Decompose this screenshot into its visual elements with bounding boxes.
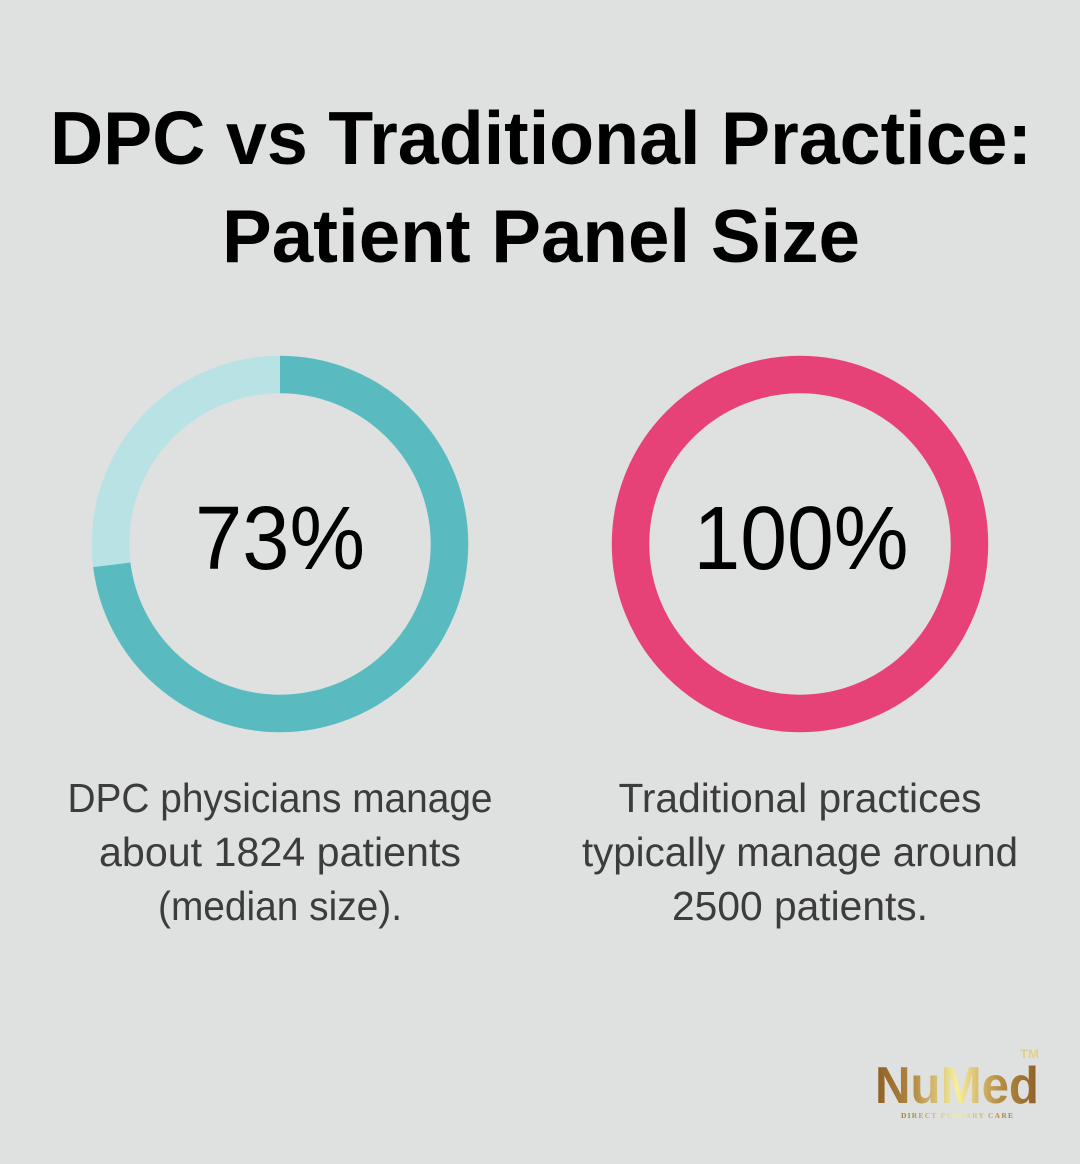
logo: NuMed: TM [1020, 1047, 1039, 1061]
title: Patient Panel Size [222, 194, 860, 278]
description: DPC physicians: about 1824 patients [99, 829, 461, 875]
logo: NuMed: NuMed [875, 1057, 1039, 1115]
title [50, 96, 1032, 278]
description: DPC physicians: DPC physicians manage [68, 775, 492, 821]
description: DPC physicians [68, 775, 492, 929]
title: DPC vs Traditional Practice: [50, 96, 1032, 180]
donut chart: 100% [630, 374, 970, 714]
logo: NuMed: DIRECT PRIMARY CARE [901, 1111, 1013, 1120]
panel: DPC 73% [68, 374, 492, 929]
description: Traditional practices: Traditional practices [618, 775, 982, 821]
description: Traditional practices: typically manage around [582, 829, 1018, 875]
stat: 73%: 73% [195, 489, 365, 589]
description: Traditional practices: 2500 patients. [672, 883, 928, 929]
description: DPC physicians: (median size). [158, 883, 402, 929]
description: Traditional practices [582, 775, 1018, 929]
donut chart: 73% [110, 374, 450, 714]
stat: 100%: 100% [694, 489, 908, 589]
panel: Traditional 100% [582, 374, 1018, 929]
